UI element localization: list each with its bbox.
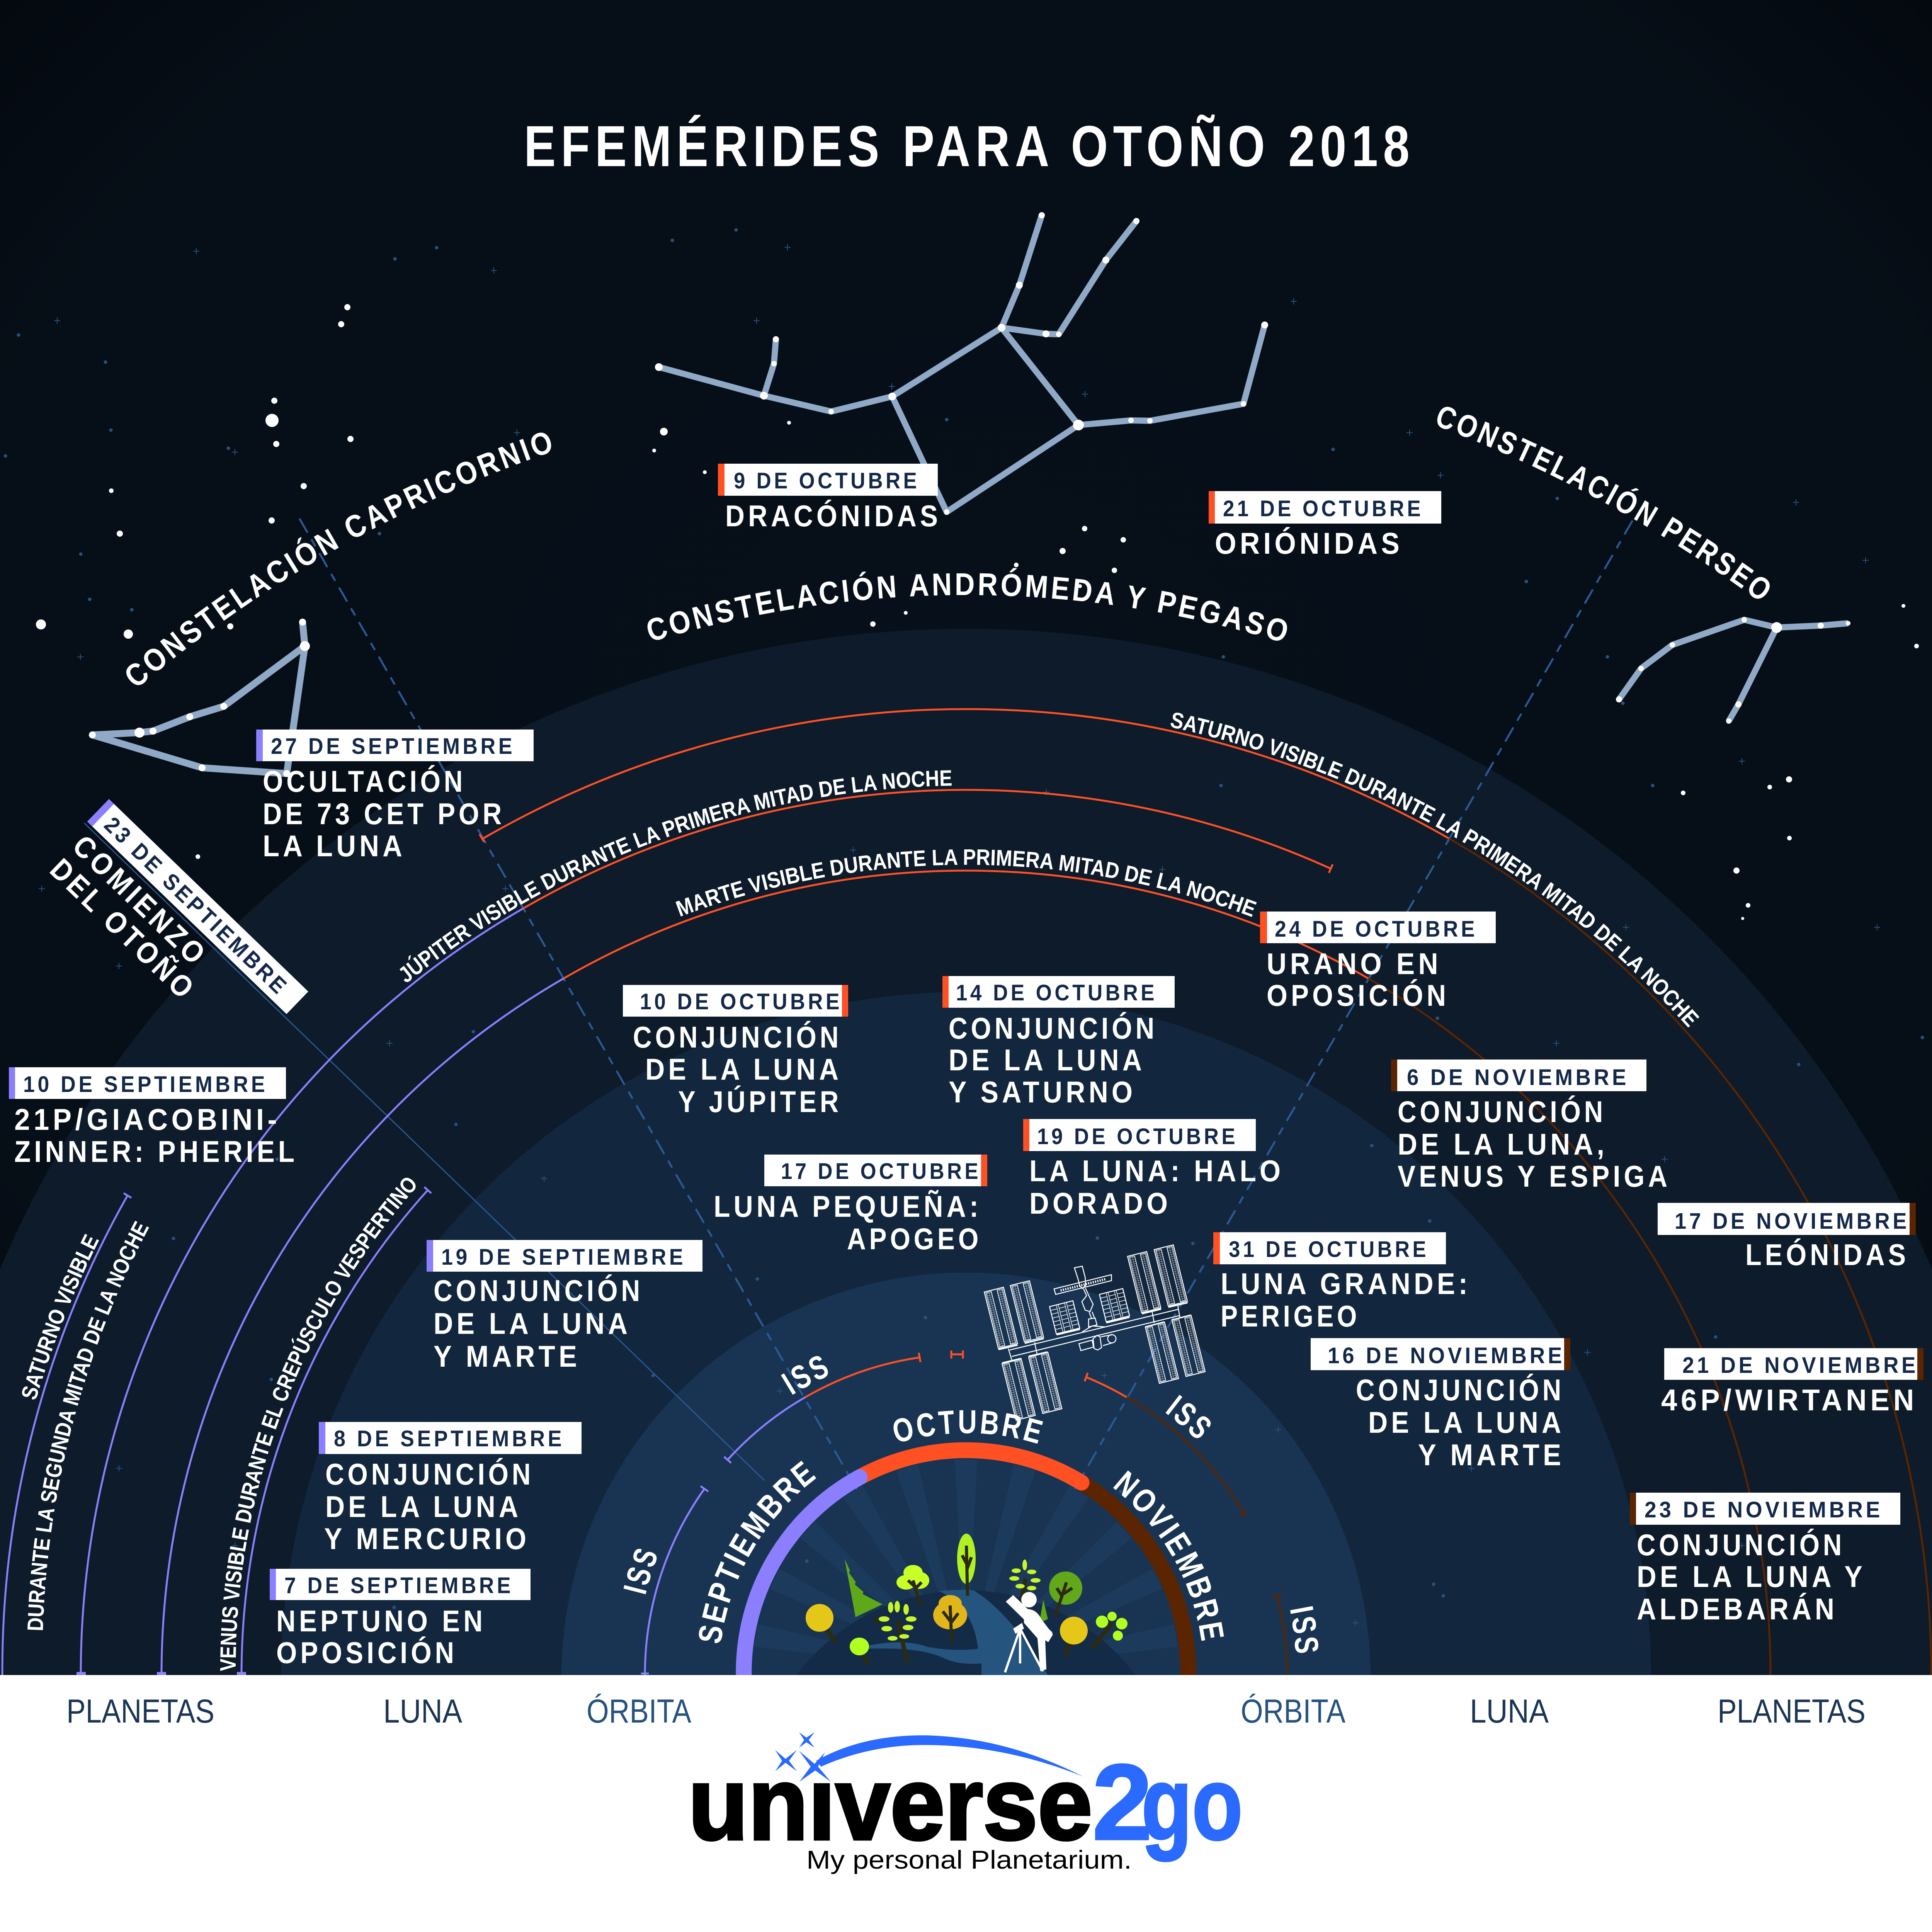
event: 23 de septiembre, rotated: 23 DE SEPTIEMBRE <box>99 812 293 1000</box>
event: 16 de noviembre <box>1311 1338 1570 1472</box>
tree: bright lime <box>896 1565 929 1590</box>
event: 31 de octubre: LUNA GRANDE: <box>1221 1267 1471 1301</box>
event: 6 de noviembre: 6 DE NOVIEMBRE <box>1407 1065 1629 1090</box>
event: 16 de noviembre: CONJUNCIÓN <box>1356 1373 1565 1407</box>
arc label: Saturn first half of night: SATURNO VISIBLE DURANTE LA PRIMERA MITAD DE LA NOCHE <box>1168 707 1704 1032</box>
ISS label right high: ISS <box>1160 1388 1220 1448</box>
radial date lines <box>84 519 1633 1557</box>
event: 27 de septiembre: OCULTACIÓN <box>263 764 466 798</box>
event: 23 de septiembre, rotated <box>39 799 308 1064</box>
arc: Saturn visibility (outer) <box>2 709 1931 1675</box>
event: 9 de octubre <box>718 464 941 533</box>
event: 27 de septiembre: DE 73 CET POR <box>263 797 505 831</box>
event: 10 de octubre: 10 DE OCTUBRE <box>640 989 842 1014</box>
event: 19 de octubre: 19 DE OCTUBRE <box>1037 1124 1238 1149</box>
ISS label right low: ISS <box>1282 1603 1326 1657</box>
event: 8 de septiembre <box>319 1422 582 1556</box>
dome: moon zone <box>281 992 1651 1677</box>
event: 23 de noviembre: 23 DE NOVIEMBRE <box>1645 1497 1883 1522</box>
event: 17 de octubre: LUNA PEQUEÑA: <box>714 1189 982 1223</box>
event: 24 de octubre: URANO EN <box>1267 947 1442 981</box>
event: 14 de octubre: Y SATURNO <box>949 1075 1136 1109</box>
event: 17 de octubre: APOGEO <box>847 1222 982 1256</box>
event: 24 de octubre: OPOSICIÓN <box>1267 978 1449 1012</box>
month arc <box>744 1450 1188 1677</box>
event: 10 de octubre: Y JÚPITER <box>678 1085 842 1119</box>
event: 10 de septiembre: ZINNER: PHERIEL <box>14 1134 298 1168</box>
International Space Station <box>984 1245 1205 1420</box>
event: 10 de octubre <box>623 985 848 1119</box>
trunks over crowns <box>908 1546 1072 1643</box>
month label: noviembre: NOVIEMBRE <box>1107 1464 1231 1646</box>
tree: slim <box>957 1534 976 1584</box>
event: 17 de noviembre <box>1658 1203 1916 1272</box>
event: 14 de octubre: DE LA LUNA <box>949 1043 1145 1077</box>
event: 16 de noviembre: Y MARTE <box>1418 1438 1565 1472</box>
rays behind the planet <box>754 1459 1178 1672</box>
tree: yellow right <box>1060 1617 1088 1645</box>
ISS label left high: ISS <box>776 1347 836 1402</box>
event: 23 de noviembre: DE LA LUNA Y <box>1637 1560 1866 1594</box>
event: 17 de octubre <box>714 1155 987 1256</box>
event: 27 de septiembre: 27 DE SEPTIEMBRE <box>271 734 515 759</box>
tree: leafy <box>879 1601 917 1641</box>
arc label: Saturn second half of night: SATURNO VISIBLE <box>16 1231 104 1403</box>
arc label: Jupiter: JÚPITER VISIBLE DURANTE LA PRIMERA MITAD DE LA NOCHE <box>393 765 952 988</box>
event: 19 de octubre <box>1023 1119 1284 1220</box>
event: 10 de septiembre: 21P/GIACOBINI- <box>14 1102 281 1136</box>
event: 17 de octubre: 17 DE OCTUBRE <box>781 1159 981 1184</box>
event: 17 de noviembre: LEÓNIDAS <box>1745 1238 1909 1272</box>
constellation: Andrómeda y Pegaso <box>655 212 1268 515</box>
event: 7 de septiembre: NEPTUNO EN <box>276 1604 486 1638</box>
event: 23 de septiembre, rotated: DEL OTOÑO <box>44 852 203 1007</box>
event: 6 de noviembre: DE LA LUNA, <box>1398 1127 1608 1161</box>
arc: Mars visibility <box>157 871 1770 1675</box>
logo swoosh and stars <box>775 1732 1083 1782</box>
event: 23 de noviembre: ALDEBARÁN <box>1637 1592 1838 1626</box>
white footer band <box>0 1675 1932 1932</box>
logo: universe2go: 2 <box>1092 1742 1152 1862</box>
event: 21 de octubre: 21 DE OCTUBRE <box>1223 496 1423 521</box>
event: 19 de octubre: DORADO <box>1029 1186 1171 1220</box>
tree trunks <box>820 1578 1112 1664</box>
logo: universe2go: go <box>1141 1745 1243 1862</box>
event: 10 de septiembre <box>9 1067 298 1168</box>
constellation: Perseo <box>1616 617 1850 724</box>
event: 21 de octubre: ORIÓNIDAS <box>1215 526 1403 560</box>
event: 24 de octubre: 24 DE OCTUBRE <box>1275 917 1478 942</box>
footer labels: LUNA <box>1470 1693 1549 1730</box>
footer labels: ÓRBITA <box>1241 1693 1346 1730</box>
event: 23 de noviembre: CONJUNCIÓN <box>1637 1528 1845 1562</box>
event: 21 de noviembre: 21 DE NOVIEMBRE <box>1682 1353 1918 1378</box>
ISS label left low: ISS <box>616 1541 666 1598</box>
logo: universe2go: My personal Planetarium. <box>806 1845 1132 1874</box>
constellation label: Capricornio: CONSTELACIÓN CAPRICORNIO <box>118 423 560 695</box>
footer labels <box>66 1693 1866 1730</box>
footer labels: LUNA <box>383 1693 463 1730</box>
event: 31 de octubre: 31 DE OCTUBRE <box>1229 1237 1429 1262</box>
event: 19 de septiembre: Y MARTE <box>434 1339 580 1373</box>
event: 7 de septiembre: 7 DE SEPTIEMBRE <box>284 1573 514 1598</box>
event: 10 de septiembre: 10 DE SEPTIEMBRE <box>23 1072 268 1097</box>
arcs: ISS visibility <box>641 1350 1287 1675</box>
event: 8 de septiembre: DE LA LUNA <box>325 1490 522 1524</box>
event: 23 de septiembre, rotated: COMIENZO <box>66 828 214 973</box>
event: 8 de septiembre: 8 DE SEPTIEMBRE <box>334 1426 565 1451</box>
event: 31 de octubre: PERIGEO <box>1221 1299 1360 1333</box>
event: 27 de septiembre <box>256 730 534 863</box>
background small stars <box>5 230 1922 1626</box>
event: 16 de noviembre: DE LA LUNA <box>1368 1405 1565 1439</box>
month label: octubre: OCTUBRE <box>889 1403 1049 1452</box>
arc label: Venus: VENUS VISIBLE DURANTE EL CREPÚSCULO VESPERTINO <box>216 1172 422 1671</box>
tree: pine <box>845 1559 883 1617</box>
constellation label: Perseo: CONSTELACIÓN PERSEO <box>1431 398 1780 610</box>
event: 7 de septiembre <box>270 1569 531 1670</box>
event: 27 de septiembre: LA LUNA <box>263 829 406 863</box>
event: 23 de noviembre <box>1630 1493 1900 1626</box>
tree: yellow round <box>806 1604 833 1632</box>
bright loose stars <box>36 304 1919 920</box>
event: 14 de octubre: 14 DE OCTUBRE <box>956 980 1157 1005</box>
event: 31 de octubre <box>1213 1232 1471 1333</box>
dome: planets zone <box>0 629 1932 1677</box>
event: 6 de noviembre: CONJUNCIÓN <box>1398 1095 1606 1129</box>
arc: Venus visibility <box>237 1187 431 1675</box>
logo: universe2go: universe <box>688 1745 1092 1861</box>
event: 17 de noviembre: 17 DE NOVIEMBRE <box>1675 1209 1910 1234</box>
event: 10 de octubre: DE LA LUNA <box>645 1052 842 1086</box>
event: 6 de noviembre <box>1391 1060 1671 1193</box>
event: 19 de octubre: LA LUNA: HALO <box>1029 1154 1284 1188</box>
arc: Jupiter visibility <box>77 790 1333 1675</box>
event: 21 de noviembre <box>1661 1348 1923 1417</box>
event: 19 de septiembre: 19 DE SEPTIEMBRE <box>441 1245 686 1270</box>
tree: leafy right <box>1009 1560 1041 1590</box>
constellation label: Andrómeda y Pegaso: CONSTELACIÓN ANDRÓMEDA Y PEGASO <box>642 567 1295 650</box>
footer labels: ÓRBITA <box>587 1693 692 1730</box>
tree: green <box>1049 1571 1082 1605</box>
event: 19 de septiembre <box>427 1240 702 1373</box>
event: 21 de octubre <box>1209 491 1441 560</box>
arc label: Saturn second half of night: DURANTE LA SEGUNDA MITAD DE LA NOCHE <box>23 1218 154 1631</box>
event: 14 de octubre: CONJUNCIÓN <box>949 1011 1158 1045</box>
event: 7 de septiembre: OPOSICIÓN <box>276 1636 457 1670</box>
event: 9 de octubre: 9 DE OCTUBRE <box>734 468 920 493</box>
observer with telescope <box>1005 1592 1053 1672</box>
event: 24 de octubre <box>1260 912 1496 1012</box>
event: 8 de septiembre: Y MERCURIO <box>324 1522 530 1556</box>
planet with trees and observer <box>796 1534 1136 1675</box>
tree: yellow <box>933 1595 967 1629</box>
tree: small pine behind observer <box>1039 1600 1048 1623</box>
tree: lime balls <box>1096 1612 1128 1641</box>
event: 19 de septiembre: CONJUNCIÓN <box>434 1274 643 1308</box>
event: 16 de noviembre: 16 DE NOVIEMBRE <box>1328 1343 1565 1368</box>
footer labels: PLANETAS <box>66 1693 214 1730</box>
event: 14 de octubre <box>942 976 1175 1109</box>
event: 19 de septiembre: DE LA LUNA <box>434 1306 631 1340</box>
event: 21 de noviembre: 46P/WIRTANEN <box>1661 1383 1918 1417</box>
month label: septiembre: SEPTIEMBRE <box>691 1453 823 1646</box>
event: 8 de septiembre: CONJUNCIÓN <box>325 1457 534 1491</box>
dome: orbit zone <box>561 1272 1371 1677</box>
footer labels: PLANETAS <box>1718 1693 1866 1730</box>
logo: universe2go <box>688 1732 1243 1874</box>
tree: small lime <box>850 1638 869 1655</box>
constellation: Capricornio <box>89 619 310 777</box>
event: 9 de octubre: DRACÓNIDAS <box>725 499 941 533</box>
event: 10 de octubre: CONJUNCIÓN <box>633 1020 842 1054</box>
event: 6 de noviembre: VENUS Y ESPIGA <box>1398 1159 1671 1193</box>
arc label: Mars: MARTE VISIBLE DURANTE LA PRIMERA MITAD DE LA NOCHE <box>673 845 1259 922</box>
title: EFEMÉRIDES PARA OTOÑO 2018 <box>524 114 1415 179</box>
